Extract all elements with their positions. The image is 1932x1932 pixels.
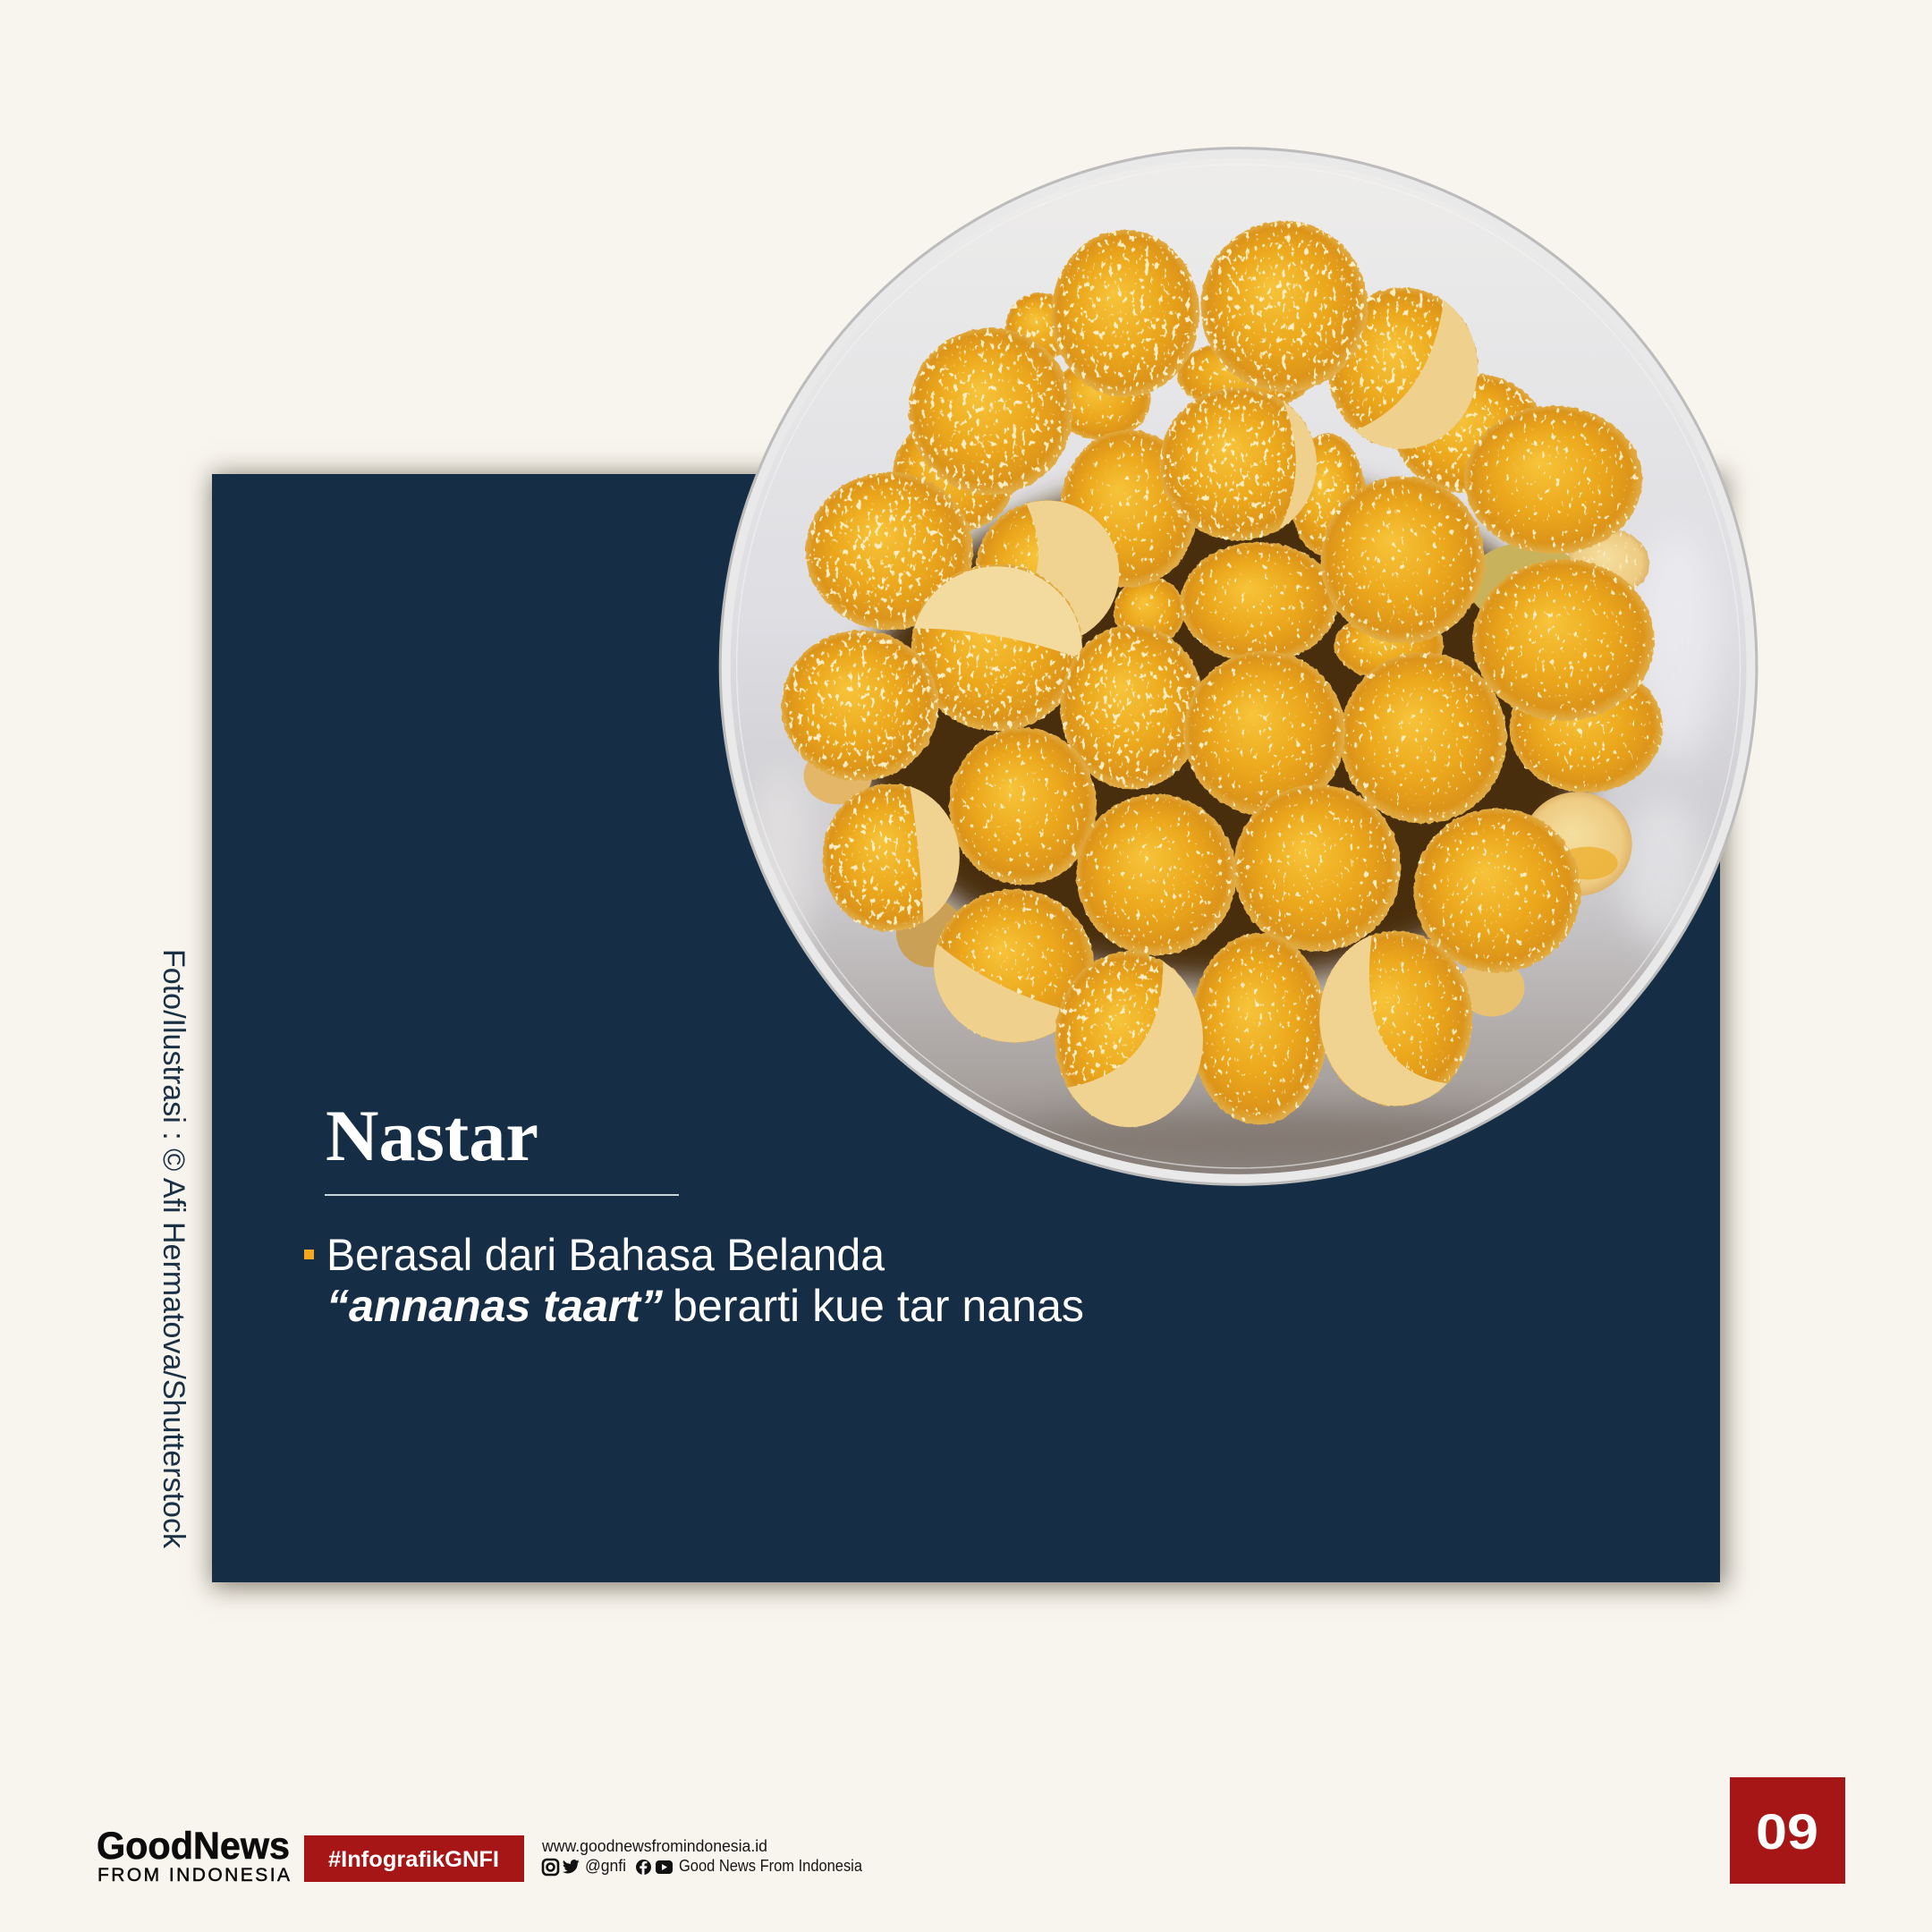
- title divider: [325, 1194, 679, 1196]
- title: Nastar: [326, 1095, 538, 1176]
- icon: youtube: [656, 1860, 673, 1874]
- text: description line 2: berarti kue tar nanas: [673, 1281, 1084, 1331]
- photo: bowl of nastar cookies: [720, 148, 1757, 1184]
- cookies: [781, 221, 1663, 1127]
- logo: GoodNews From Indonesia: GoodNews: [97, 1825, 290, 1868]
- icon: instagram: [543, 1860, 558, 1875]
- website url: www.goodnewsfromindonesia.id: [541, 1837, 767, 1855]
- page name: Good News From Indonesia: [679, 1857, 863, 1875]
- page number badge: 09: [1756, 1803, 1818, 1860]
- panel: navy background card: [212, 474, 1720, 1582]
- bullet marker: [304, 1250, 314, 1259]
- hashtag badge: #InfografikGNFI: [328, 1847, 499, 1872]
- text: description line 2: “annanas taart”: [326, 1281, 663, 1331]
- logo: GoodNews From Indonesia: FROM INDONESIA: [97, 1865, 290, 1885]
- text: description line 1: Berasal dari Bahasa Belanda: [326, 1230, 885, 1280]
- photo credit: Foto/Ilustrasi : © Afi Hermatova/Shutterstock: [157, 949, 191, 1549]
- social handle: @gnfi: [585, 1857, 626, 1875]
- shadow gaps beneath cookies: [855, 474, 1595, 981]
- text: description line 2: [326, 1281, 1084, 1331]
- page number badge: [1730, 1777, 1845, 1884]
- icon: twitter: [563, 1860, 580, 1873]
- icon: facebook: [636, 1860, 651, 1875]
- logo: GoodNews From Indonesia: [97, 1825, 290, 1885]
- hashtag badge: [304, 1835, 524, 1882]
- bowl: [720, 148, 1757, 1184]
